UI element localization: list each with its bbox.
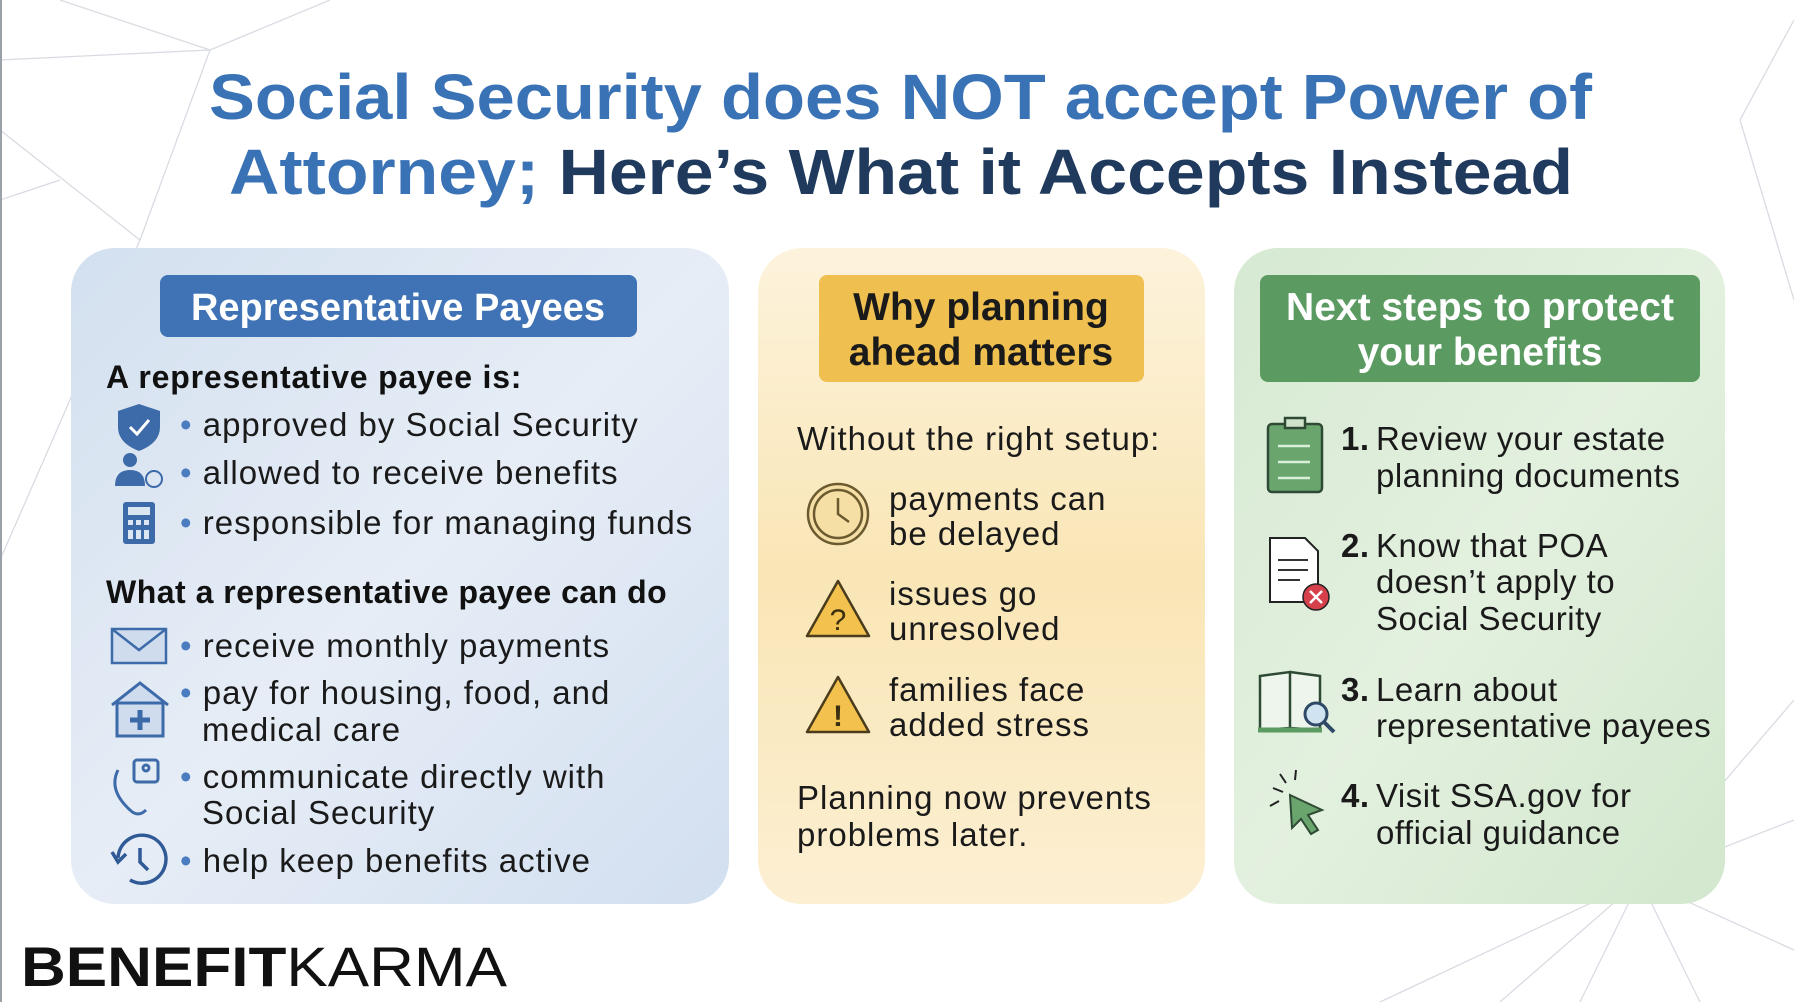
list: payee abilities: medical care [202, 711, 401, 748]
title: Attorney; Here’s What it Accepts Instead [229, 136, 1573, 208]
icon: envelope [112, 629, 166, 663]
icon: clock [808, 484, 868, 544]
text: families stress: families face [889, 671, 1085, 708]
heading: next steps [1260, 275, 1700, 382]
step 2: Social Security [1376, 600, 1602, 637]
step 3 [1341, 671, 1711, 744]
text: payments delayed: be delayed [889, 515, 1060, 552]
icon: house medical [112, 683, 168, 736]
step 1: 1. [1341, 420, 1370, 457]
text: planning now prevents problems: problems later. [797, 816, 1028, 853]
heading: why planning ahead matters [819, 275, 1144, 382]
text: payments delayed: payments can [889, 480, 1106, 517]
icon: warning question: ? [830, 604, 846, 637]
heading: why planning ahead matters: Why planning [853, 286, 1109, 329]
list: payee attributes: • approved by Social Security [180, 406, 639, 443]
heading: representative payees: Representative Payees [191, 287, 605, 329]
title: Social Security does NOT accept Power of [209, 61, 1593, 133]
icon: document with x [1270, 538, 1329, 610]
step 3: 3. [1341, 671, 1370, 708]
text: payments delayed [889, 480, 1106, 552]
step 2 [1341, 527, 1615, 637]
text: families stress: added stress [889, 706, 1090, 743]
subheading: a representative payee is: A representative payee is: [106, 359, 522, 395]
step 2: Know that POA [1376, 527, 1608, 564]
list: payee abilities: • help keep benefits active [180, 842, 591, 879]
list: payee attributes [180, 406, 693, 541]
panel: representative payees [71, 248, 729, 904]
step 3: representative payees [1376, 707, 1711, 744]
icon: clipboard [1268, 418, 1322, 492]
heading: representative payees [160, 275, 637, 337]
text: issues unresolved: unresolved [889, 610, 1060, 647]
list: payee attributes: • allowed to receive benefits [180, 454, 619, 491]
list: payee abilities: Social Security [202, 794, 435, 831]
text: planning now prevents problems [797, 779, 1152, 853]
step 1: planning documents [1376, 457, 1680, 494]
text: without the right setup: Without the right setup: [797, 420, 1160, 457]
text: issues unresolved [889, 575, 1060, 647]
step 4 [1341, 777, 1632, 851]
heading: next steps: your benefits [1358, 331, 1602, 374]
panel: why planning ahead matters [758, 248, 1205, 904]
text: planning now prevents problems: Planning now prevents [797, 779, 1152, 816]
list: payee abilities: • receive monthly payments [180, 627, 610, 664]
step 1: Review your estate [1376, 420, 1666, 457]
step 4: official guidance [1376, 814, 1621, 851]
panel: next steps [1234, 248, 1725, 904]
icon: cursor click [1270, 770, 1322, 834]
step 2: doesn’t apply to [1376, 563, 1615, 600]
heading: next steps: Next steps to protect [1286, 286, 1674, 329]
icon: phone contact [115, 760, 158, 814]
icon: calculator [123, 502, 155, 544]
icon: warning exclamation: ! [833, 700, 843, 733]
list: payee abilities: • communicate directly with [180, 758, 606, 795]
icon: shield [118, 404, 160, 451]
text: families stress [889, 671, 1090, 743]
list: payee attributes: • responsible for managing funds [180, 504, 693, 541]
subheading: what a payee can do: What a representative payee can do [106, 574, 667, 610]
icon: warning exclamation [807, 677, 869, 733]
text: issues unresolved: issues go [889, 575, 1037, 612]
heading: why planning ahead matters: ahead matters [849, 331, 1113, 374]
step 2: 2. [1341, 527, 1370, 564]
icon: warning question [807, 581, 869, 637]
logo: benefitkarma: BENEFIT KARMA [21, 935, 508, 998]
title [209, 61, 1593, 208]
list: payee abilities [180, 627, 610, 879]
icon: person with money bag [115, 453, 162, 487]
step 3: Learn about [1376, 671, 1558, 708]
icon: book with magnifier [1258, 672, 1334, 732]
list: payee abilities: • pay for housing, food, and [180, 674, 610, 711]
step 1 [1341, 420, 1680, 494]
step 4: Visit SSA.gov for [1376, 777, 1632, 814]
icon: history clock [112, 835, 166, 883]
step 4: 4. [1341, 777, 1370, 814]
